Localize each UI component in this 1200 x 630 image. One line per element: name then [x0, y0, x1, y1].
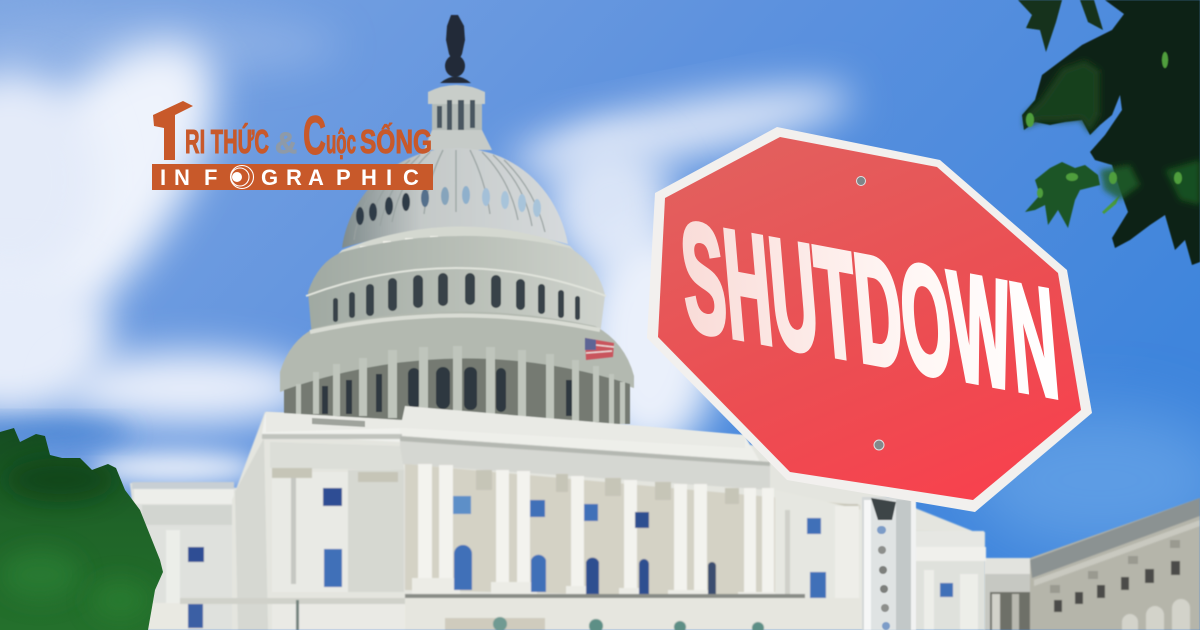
peristyle dots: [360, 236, 556, 254]
sign white border: [647, 127, 1092, 512]
sign post: [862, 497, 916, 630]
flag: [585, 338, 614, 360]
portico columns: [418, 464, 774, 594]
logo banner text: INF: [160, 165, 217, 190]
dome shell: [342, 148, 568, 248]
drum windows: [333, 273, 580, 322]
Capitol dome: [266, 15, 745, 448]
Capitol main building: [130, 406, 986, 630]
logo banner: [152, 164, 433, 190]
left tree: [0, 420, 170, 630]
sign red face: [658, 137, 1081, 500]
balustrade: [266, 406, 745, 448]
logo: Tri thức & Cuộc sống Infographic: [152, 101, 433, 190]
logo banner text: [160, 165, 419, 190]
upper drum: [308, 236, 605, 338]
column bases: [412, 578, 780, 604]
sign bolt top: [856, 176, 866, 186]
top-right tree foliage: [1018, 0, 1200, 265]
right wing building: [984, 498, 1200, 630]
sign bolt bottom: [874, 440, 884, 450]
logo name: RI THỨC: [185, 123, 269, 160]
logo name: &: [275, 127, 297, 160]
colonnade cornice: [280, 311, 634, 392]
left wing: [130, 483, 240, 630]
logo banner text: GRAPHIC: [261, 165, 419, 190]
colonnade wall: [284, 358, 630, 424]
recessed portico wall: [405, 464, 860, 600]
colonnade dark arches: [322, 367, 572, 416]
logo target icon: [230, 166, 254, 188]
logo name: SỐNG: [360, 122, 432, 160]
logo T mark: [153, 101, 193, 160]
column capitals: [272, 468, 858, 516]
wing east of portico: [775, 490, 862, 630]
lantern: [428, 85, 485, 104]
shutdown stop sign: [647, 127, 1092, 512]
lower floor and railings: [405, 598, 863, 630]
statue of freedom: [440, 15, 471, 83]
portico windows: [323, 488, 953, 606]
sign heading: SHUTDOWN: [675, 188, 1064, 430]
peristyle ring: [320, 226, 590, 272]
logo name: [185, 104, 432, 166]
logo name: uộc: [326, 123, 356, 160]
dome windows: [356, 186, 541, 225]
colonnade columns: [296, 346, 625, 424]
logo name: C: [303, 104, 326, 166]
centre block: [232, 406, 985, 630]
